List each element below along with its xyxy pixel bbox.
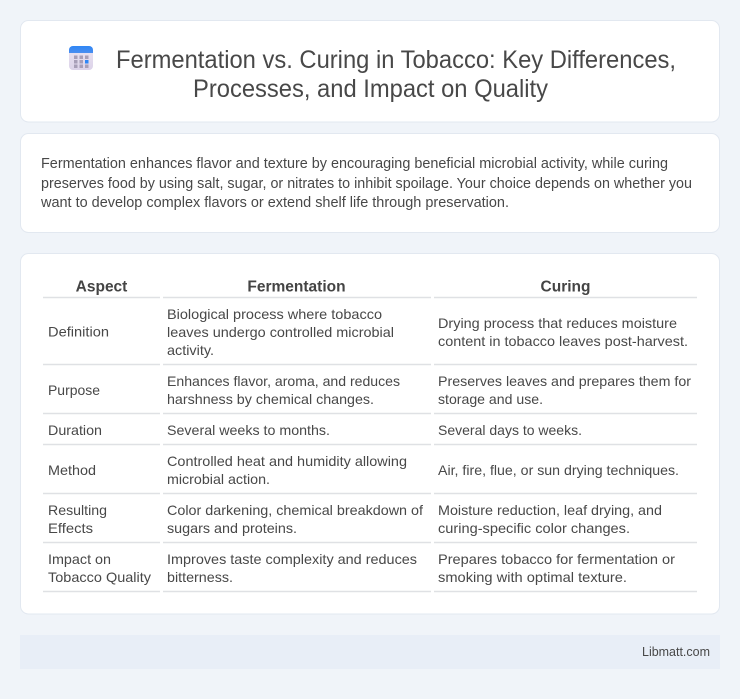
footer [20, 635, 720, 669]
row: resulting effects: Resulting [48, 502, 107, 518]
row: resulting effects: Effects [48, 520, 93, 536]
panel: comparison table [20, 254, 720, 614]
title: Processes, and Impact on Quality [193, 75, 548, 103]
icon: calendar [69, 46, 93, 70]
row: impact on tobacco quality: bitterness. [167, 569, 233, 585]
row: resulting effects [48, 502, 662, 536]
row: impact on tobacco quality: Improves taste complexity and reduces [167, 551, 417, 567]
table header row [76, 278, 590, 296]
row: purpose: Preserves leaves and prepares them for [438, 373, 691, 389]
text block: summary paragraph [40, 156, 692, 211]
row: method: microbial action. [167, 471, 270, 487]
row: definition: leaves undergo controlled microbial [167, 324, 394, 340]
table header row: Fermentation [247, 278, 346, 296]
row: resulting effects: curing-specific color changes. [438, 520, 630, 536]
row: definition: Biological process where tobacco [167, 306, 382, 322]
row: purpose: harshness by chemical changes. [167, 391, 374, 407]
row: method: Air, fire, flue, or sun drying techniques. [438, 462, 679, 478]
row: impact on tobacco quality: Impact on [48, 551, 111, 567]
row: impact on tobacco quality: Prepares tobacco for fermentation or [438, 551, 675, 567]
row: definition: activity. [167, 342, 214, 358]
title [116, 46, 676, 103]
row: impact on tobacco quality [48, 551, 675, 585]
row: purpose: storage and use. [438, 391, 543, 407]
row: resulting effects: Color darkening, chemical breakdown of [167, 502, 423, 518]
text block: summary paragraph: preserves food by using salt, sugar, or nitrates to inhibit spoilage. Your choice depends on whether you [41, 176, 692, 192]
row: purpose [48, 373, 691, 407]
table header row: Aspect [76, 278, 127, 296]
text block: summary paragraph: want to develop complex flavors or extend shelf life through preservation. [40, 195, 509, 211]
footer credit: Libmatt.com [642, 645, 710, 659]
row: resulting effects: Moisture reduction, leaf drying, and [438, 502, 662, 518]
row: purpose: Enhances flavor, aroma, and reduces [167, 373, 400, 389]
panel: summary [20, 134, 720, 232]
row: definition: content in tobacco leaves post-harvest. [438, 333, 688, 349]
row: resulting effects: sugars and proteins. [167, 520, 297, 536]
row: duration: Duration [48, 422, 102, 438]
panel: title header [20, 20, 720, 122]
row: method: Controlled heat and humidity allowing [167, 453, 407, 469]
text block: summary paragraph: Fermentation enhances flavor and texture by encouraging beneficial microbial activity, while curing [41, 156, 668, 172]
row: duration: Several days to weeks. [438, 422, 582, 438]
row: impact on tobacco quality: Tobacco Quality [48, 569, 151, 585]
row: definition: Drying process that reduces moisture [438, 315, 677, 331]
row: definition: Definition [48, 324, 109, 340]
row: definition [48, 306, 688, 358]
title: Fermentation vs. Curing in Tobacco: Key Differences, [116, 46, 676, 74]
row: purpose: Purpose [48, 382, 100, 398]
table header row: Curing [541, 278, 590, 296]
row: duration: Several weeks to months. [167, 422, 330, 438]
row: method: Method [48, 462, 96, 478]
row: duration [48, 422, 582, 438]
row: method [48, 453, 679, 487]
row: impact on tobacco quality: smoking with optimal texture. [438, 569, 627, 585]
